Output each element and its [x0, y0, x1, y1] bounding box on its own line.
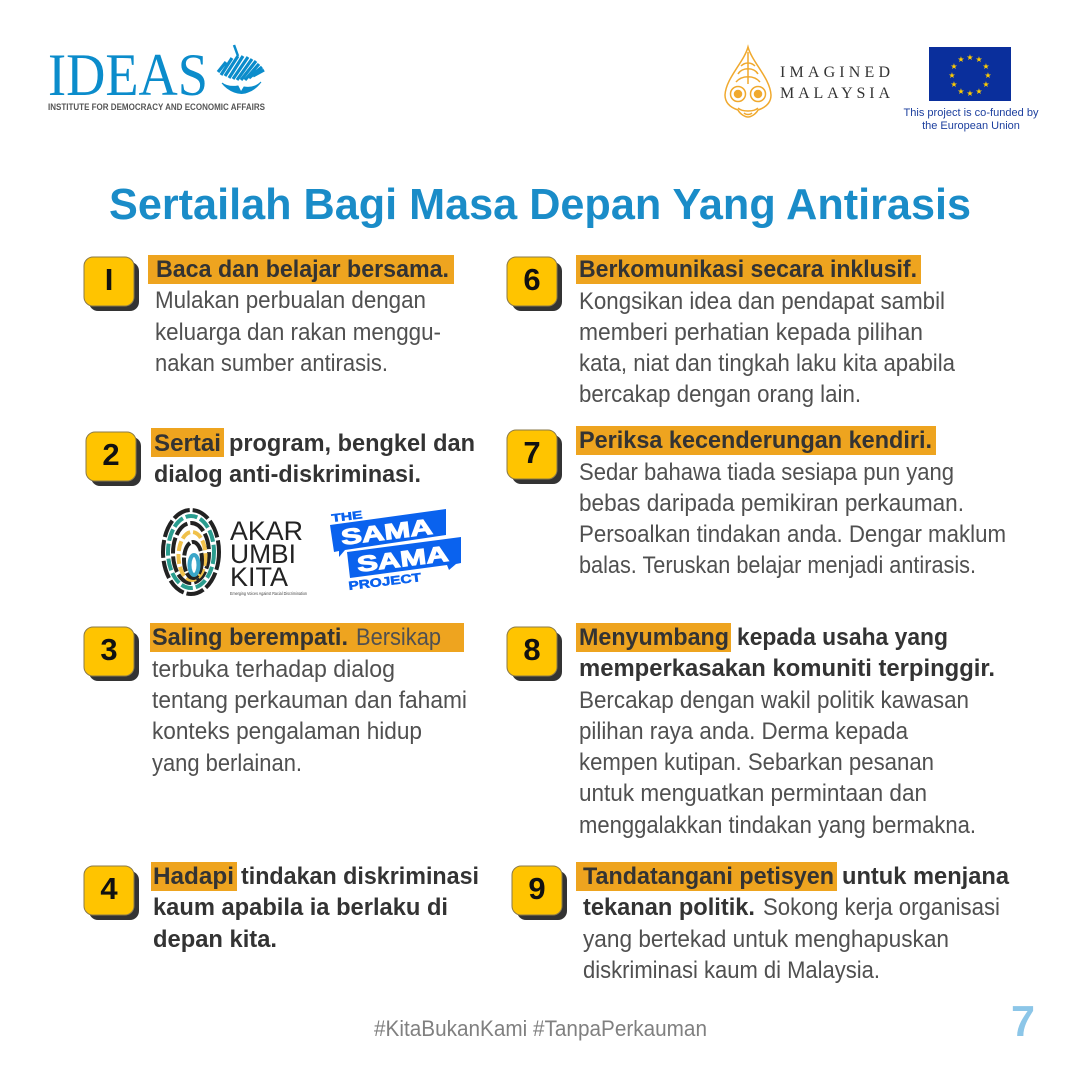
- text 9: [583, 863, 1010, 984]
- logo: EU flag: ★: [982, 62, 990, 71]
- text 8: pilihan raya anda. Derma kepada: [579, 718, 909, 745]
- EU caption: [904, 107, 1039, 132]
- text 6: Kongsikan idea dan pendapat sambil: [579, 288, 945, 315]
- badge 9: [512, 866, 567, 920]
- title: Sertailah Bagi Masa Depan Yang Antirasis: [109, 180, 971, 229]
- logo: EU flag: ★: [957, 87, 965, 96]
- item 7: [507, 426, 1006, 579]
- text 3: Bersikap: [356, 624, 441, 651]
- logo: The Sama Sama Project: PROJECT: [348, 570, 423, 593]
- text 3: Saling berempati.: [152, 624, 348, 651]
- text 9: Tandatangani petisyen: [583, 863, 834, 890]
- badge 6: 6: [523, 262, 541, 297]
- logo: The Sama Sama Project: SAMA: [340, 514, 434, 550]
- logo: EU flag: ★: [975, 87, 983, 96]
- text 1: [155, 256, 449, 377]
- item 2: [86, 428, 475, 488]
- text 4: kaum apabila ia berlaku di: [153, 894, 448, 921]
- logo: Akar Umbi Kita: AKAR: [230, 516, 303, 546]
- text 8: kempen kutipan. Sebarkan pesanan: [579, 749, 934, 776]
- text 4: [153, 863, 479, 953]
- badge 1: I: [105, 262, 113, 297]
- text 6: kata, niat dan tingkah laku kita apabila: [579, 350, 956, 377]
- hashtags: #KitaBukanKami #TanpaPerkauman: [374, 1016, 707, 1041]
- text 8: Menyumbang: [579, 624, 729, 651]
- text 3: terbuka terhadap dialog: [152, 656, 395, 683]
- highlight 8: [576, 623, 731, 652]
- text 6: [579, 256, 956, 408]
- logo: EU flag: ★: [957, 55, 965, 64]
- item 1: [84, 255, 454, 377]
- text 9: yang bertekad untuk menghapuskan: [583, 926, 949, 953]
- logo: Imagined Malaysia: IMAGINED: [780, 64, 890, 81]
- highlight 3: [150, 623, 464, 652]
- text 8: untuk menguatkan permintaan dan: [579, 780, 927, 807]
- text 3: [152, 624, 467, 777]
- text 1: keluarga dan rakan menggu-: [155, 319, 441, 346]
- text 8: Bercakap dengan wakil politik kawasan: [579, 687, 969, 714]
- badge 7: 7: [523, 435, 541, 470]
- text 6: memberi perhatian kepada pilihan: [579, 319, 923, 346]
- icon: wayang leaf: [725, 47, 771, 117]
- text 9: untuk menjana: [842, 863, 1010, 890]
- logo: EU flag: ★: [966, 89, 974, 98]
- icon: bird: [218, 45, 264, 93]
- text 1: Mulakan perbualan dengan: [155, 287, 426, 314]
- text 6: Berkomunikasi secara inklusif.: [579, 256, 917, 283]
- logo: EU flag: ★: [950, 80, 958, 89]
- text 9: diskriminasi kaum di Malaysia.: [583, 957, 880, 984]
- logo: EU flag: ★: [982, 80, 990, 89]
- logo: Imagined Malaysia: MALAYSIA: [780, 85, 890, 102]
- logo: EU flag: ★: [950, 62, 958, 71]
- highlight 9: [576, 862, 837, 891]
- logo: IDEAS: IDEAS: [48, 42, 208, 108]
- badge 2: [86, 432, 141, 486]
- badge 8: [507, 627, 562, 681]
- text 2: program, bengkel dan: [229, 430, 475, 457]
- text 3: yang berlainan.: [152, 750, 302, 777]
- icon: fingerprint: [163, 510, 219, 594]
- badge 9: 9: [528, 871, 546, 906]
- badge 2: 2: [102, 437, 120, 472]
- logo: EU flag: ★: [975, 55, 983, 64]
- logo: EU flag: ★: [948, 71, 956, 80]
- item 4: [84, 862, 479, 953]
- EU caption: the European Union: [922, 120, 1020, 132]
- text 2: dialog anti-diskriminasi.: [154, 461, 421, 488]
- text 8: [579, 624, 995, 839]
- text 4: tindakan diskriminasi: [241, 863, 479, 890]
- text 3: konteks pengalaman hidup: [152, 718, 422, 745]
- text 4: Hadapi: [153, 863, 234, 890]
- text 3: tentang perkauman dan fahami: [152, 687, 467, 714]
- item 8: [507, 623, 995, 839]
- badge 3: 3: [100, 632, 118, 667]
- badge 1: [84, 257, 139, 311]
- badge 3: [84, 627, 139, 681]
- badge 4: 4: [100, 871, 118, 906]
- highlight 7: [576, 426, 936, 455]
- EU caption: This project is co-funded by: [904, 107, 1039, 119]
- badge 6: [507, 257, 562, 311]
- text 8: menggalakkan tindakan yang bermakna.: [579, 812, 976, 839]
- badge 8: 8: [523, 632, 541, 667]
- page number: 7: [1011, 997, 1035, 1046]
- text 7: [579, 427, 1006, 579]
- text 7: Sedar bahawa tiada sesiapa pun yang: [579, 459, 954, 486]
- highlight 4: [151, 862, 237, 891]
- logo: Akar Umbi Kita: [163, 510, 307, 596]
- badge 7: [507, 430, 562, 484]
- logo: Akar Umbi Kita: UMBI: [230, 539, 296, 569]
- badge 4: [84, 866, 139, 920]
- text 6: bercakap dengan orang lain.: [579, 381, 861, 408]
- text 2: [154, 430, 475, 488]
- text 9: tekanan politik.: [583, 894, 755, 921]
- logo: The Sama Sama Project: SAMA: [356, 541, 450, 577]
- text 1: Baca dan belajar bersama.: [156, 256, 449, 283]
- item 9: [512, 862, 1010, 984]
- logo: EU flag: [904, 47, 1039, 132]
- text 8: kepada usaha yang: [737, 624, 948, 651]
- highlight 6: [576, 255, 921, 284]
- item 6: [507, 255, 956, 408]
- logo: Akar Umbi Kita: Emerging Voices Against Racial Discrimination: [230, 591, 307, 596]
- text 7: balas. Teruskan belajar menjadi antirasis.: [579, 552, 976, 579]
- text 4: depan kita.: [153, 926, 277, 953]
- text 7: Persoalkan tindakan anda. Dengar maklum: [579, 521, 1006, 548]
- text 7: bebas daripada pemikiran perkauman.: [579, 490, 964, 517]
- text 9: Sokong kerja organisasi: [763, 894, 1000, 921]
- logo: Imagined Malaysia: [725, 47, 890, 117]
- highlight 1: [148, 255, 454, 284]
- text 1: nakan sumber antirasis.: [155, 350, 388, 377]
- logo: EU flag: ★: [966, 53, 974, 62]
- logo: The Sama Sama Project: [330, 509, 461, 593]
- text 7: Periksa kecenderungan kendiri.: [579, 427, 932, 454]
- text 8: memperkasakan komuniti terpinggir.: [579, 655, 995, 682]
- item 3: [84, 623, 467, 777]
- logo: Akar Umbi Kita: KITA: [230, 562, 288, 592]
- logo: IDEAS: INSTITUTE FOR DEMOCRACY AND ECONOMIC AFFAIRS: [48, 102, 265, 112]
- highlight 2: [151, 428, 224, 457]
- logo: EU flag: ★: [984, 71, 992, 80]
- logo: The Sama Sama Project: THE: [331, 509, 363, 525]
- text 2: Sertai: [154, 430, 221, 457]
